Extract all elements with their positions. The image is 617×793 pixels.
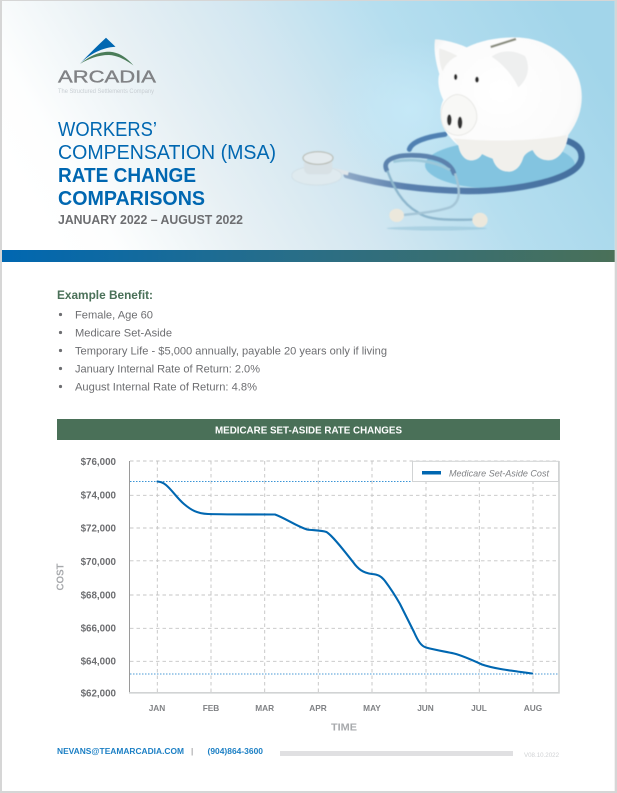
title <box>58 119 276 210</box>
y axis labels: $70,000 <box>81 557 117 568</box>
snout <box>441 94 477 135</box>
y axis labels: $62,000 <box>81 688 117 699</box>
chart header bar <box>57 419 560 440</box>
y axis labels: $76,000 <box>81 457 117 468</box>
header banner <box>2 1 615 250</box>
y axis labels <box>81 457 117 699</box>
y axis labels: $74,000 <box>81 490 117 501</box>
y axis labels: $68,000 <box>81 590 117 601</box>
grid lines <box>130 461 558 692</box>
chart header bar: MEDICARE SET-ASIDE RATE CHANGES <box>215 425 402 436</box>
x axis labels: JAN <box>149 703 165 713</box>
date range: JANUARY 2022 – AUGUST 2022 <box>58 212 243 227</box>
legend: Medicare Set-Aside Cost <box>449 468 549 478</box>
x axis labels <box>149 703 542 713</box>
logo mark <box>80 38 134 66</box>
title: RATE CHANGE <box>58 165 196 187</box>
logo <box>58 38 156 95</box>
photo: piggy bank <box>434 37 582 172</box>
y axis labels: $64,000 <box>81 656 117 667</box>
floor shadow inside ring <box>425 141 575 189</box>
coin slot <box>491 39 516 47</box>
ear <box>492 51 528 87</box>
x axis labels: FEB <box>203 703 219 713</box>
x axis labels: JUN <box>417 703 434 713</box>
example benefit list: January Internal Rate of Return: 2.0% <box>75 363 260 375</box>
x axis labels: JUL <box>471 703 487 713</box>
photo: stethoscope <box>292 134 582 230</box>
x axis labels: MAY <box>363 703 381 713</box>
logo wordmark: ARCADIA <box>58 66 156 86</box>
example benefit list: August Internal Rate of Return: 4.8% <box>75 381 257 393</box>
example benefit list: Female, Age 60 <box>75 309 153 321</box>
example benefit heading: Example Benefit: <box>57 288 153 302</box>
example benefit list <box>59 309 387 393</box>
title: COMPARISONS <box>58 188 205 210</box>
example benefit list: Temporary Life - $5,000 annually, payable 20 years only if living <box>75 345 387 357</box>
y axis labels: $72,000 <box>81 524 117 535</box>
chest piece <box>333 170 348 173</box>
legend <box>412 461 558 482</box>
contact phone: (904)864-3600 <box>208 746 263 756</box>
logo tagline: The Structured Settlements Company <box>58 88 155 95</box>
reference lines <box>130 480 412 482</box>
eyes <box>454 74 457 80</box>
x axis labels: MAR <box>255 703 274 713</box>
title: WORKERS’ <box>58 119 157 141</box>
chart frame <box>128 461 130 692</box>
line chart <box>56 457 559 734</box>
title: COMPENSATION (MSA) <box>58 142 276 164</box>
x axis title: TIME <box>331 723 357 734</box>
ear tips <box>389 209 404 222</box>
example benefit list: Medicare Set-Aside <box>75 327 172 339</box>
footer <box>57 746 559 759</box>
gradient band <box>2 250 615 262</box>
footer rule <box>280 751 513 756</box>
version: V08.10.2022 <box>524 752 559 759</box>
separator: | <box>191 746 193 756</box>
x axis labels: APR <box>309 703 327 713</box>
y axis labels: $66,000 <box>81 623 117 634</box>
y axis title: COST <box>56 563 66 590</box>
x axis labels: AUG <box>524 703 542 713</box>
data line: Medicare Set-Aside Cost <box>158 482 532 674</box>
contact email: NEVANS@TEAMARCADIA.COM <box>57 746 184 756</box>
